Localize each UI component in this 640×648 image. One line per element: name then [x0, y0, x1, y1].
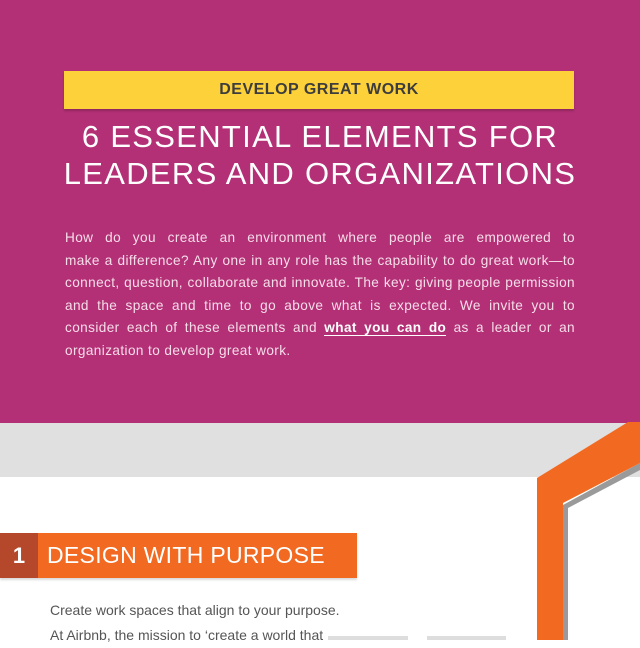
intro paragraph: make a difference? Any one in any role has the capability to do great work—to: [65, 253, 575, 268]
section 1 body text: [50, 602, 340, 643]
intro paragraph: organization to develop great work.: [65, 343, 291, 358]
section 1 heading: [0, 533, 357, 578]
title: 6 ESSENTIAL ELEMENTS FOR: [82, 119, 558, 154]
gray band: [0, 423, 640, 477]
intro paragraph: How do you create an environment where people are empowered to: [65, 230, 575, 245]
intro paragraph: consider each of these elements and what you can do as a leader or an: [65, 320, 575, 335]
banner: develop great work: DEVELOP GREAT WORK: [219, 81, 419, 98]
banner: develop great work: [64, 71, 574, 109]
intro paragraph: and the space and time to go above what is expected. We invite you to: [65, 298, 575, 313]
panel: magenta header: [0, 0, 640, 423]
intro paragraph: [65, 230, 575, 358]
heading text: [38, 533, 357, 578]
number badge: 1: [13, 543, 25, 568]
heading text: DESIGN WITH PURPOSE: [47, 542, 325, 568]
intro paragraph: connect, question, collaborate and innovate. The key: giving people permission: [65, 275, 575, 290]
title: [64, 119, 576, 191]
section 1 body text: Create work spaces that align to your purpose.: [50, 602, 340, 618]
title: LEADERS AND ORGANIZATIONS: [64, 156, 576, 191]
section 1 body text: At Airbnb, the mission to ‘create a world that: [50, 627, 323, 643]
number badge: [0, 533, 38, 578]
